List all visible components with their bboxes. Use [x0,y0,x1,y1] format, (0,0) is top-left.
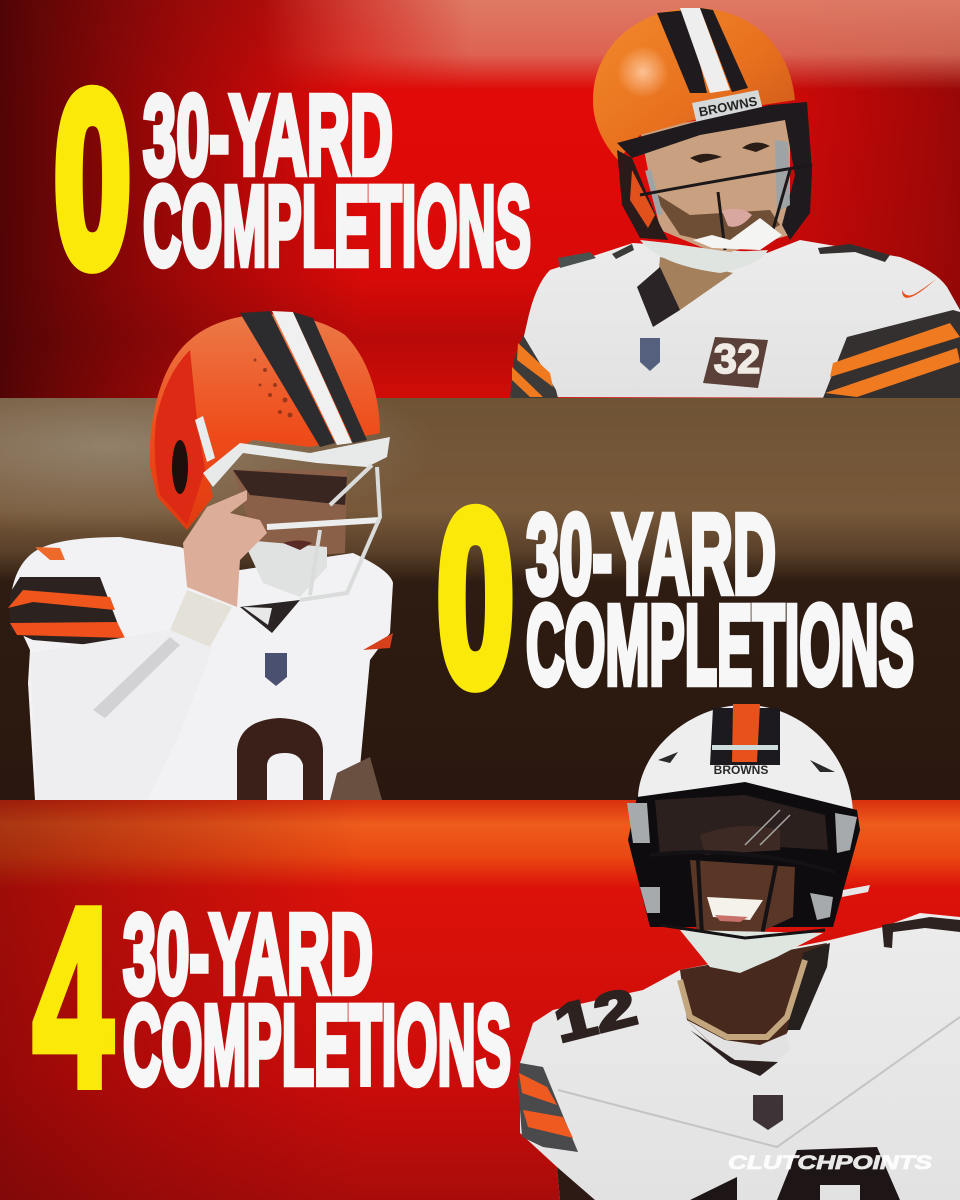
panel: middle player stat [0,311,960,800]
top player: jersey [510,240,960,398]
middle player: jersey and arm [8,537,393,800]
NFL shield [640,338,660,371]
top red stadium background [0,0,960,398]
top stat label: 30-YARD [143,72,393,198]
jersey number [237,718,323,800]
top player: helmet and face [593,8,812,273]
swoosh [902,279,936,298]
panel: top player stat [0,0,960,398]
neck and chain [680,943,827,1070]
bottom player: helmet and face: BROWNS [714,763,768,777]
top stat label [142,92,530,270]
middle stat label [525,510,914,688]
top stat number: 0 [54,42,131,317]
panel: bottom player stat: COMPLETIONS [123,982,511,1108]
jersey patch 32 [703,335,768,388]
bottom player: jersey [518,913,960,1200]
forearm sleeve [82,637,127,648]
shoulder number: 12 [549,978,642,1054]
bottom stat number: 4 [33,855,113,1139]
jersey number [690,1147,900,1200]
watermark: ClutchPoints: CLUTCHPOINTS [728,1153,932,1174]
bottom red stadium background [0,800,960,1200]
middle brown stadium background [0,398,960,800]
middle player: helmet and face [150,311,390,607]
bottom stat label: 30-YARD [123,891,373,1017]
helmet stripes [710,708,780,765]
panel: bottom player stat [0,704,960,1200]
sleeve stripes [518,1063,578,1152]
middle stat number: 0 [437,461,514,736]
bottom player: helmet and face [627,704,870,973]
sleeve stripes [10,577,127,648]
panel: top player stat: COMPLETIONS [143,163,531,289]
top player: helmet and face: BROWNS [697,93,759,120]
jersey patch 32: 32 [714,335,760,382]
bottom stat label [122,910,510,1088]
